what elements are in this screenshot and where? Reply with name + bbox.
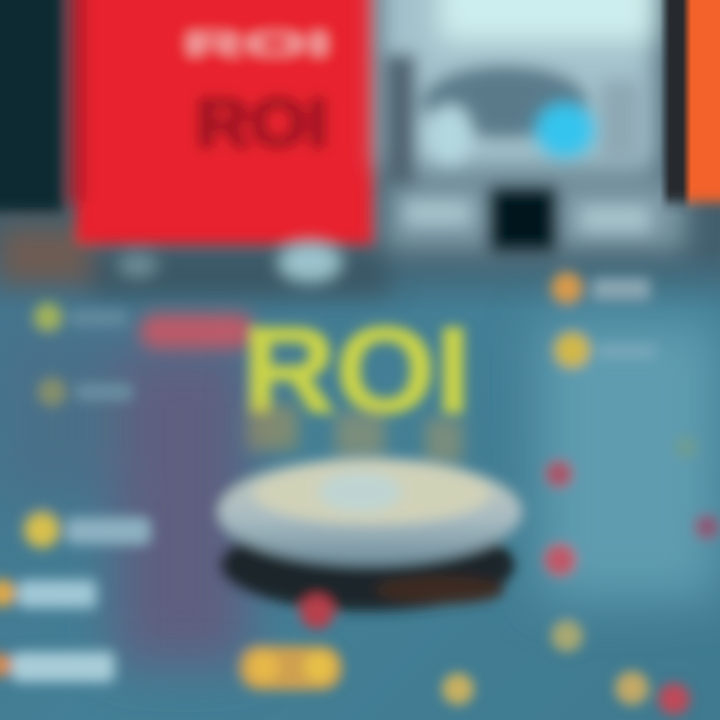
label 3: [24, 512, 150, 548]
background: brown floor left: [0, 228, 390, 295]
label 2: [38, 378, 132, 406]
label 7: [554, 332, 656, 368]
panel: orange screen top right: [660, 0, 720, 202]
reflected ROI letters: [248, 405, 463, 463]
robot body: [378, 0, 685, 250]
scattered data points: [300, 435, 720, 715]
panel: robot: [378, 0, 685, 250]
label 1: [34, 303, 126, 331]
left side labels: [0, 303, 150, 682]
dish top: [218, 458, 522, 566]
robot neck: [405, 188, 650, 250]
panel: red ROI box: [70, 0, 374, 244]
robot eye: [535, 102, 595, 158]
bottom yellow badge: [240, 646, 342, 690]
pedestal dish: [218, 458, 522, 611]
right side labels: [551, 272, 656, 368]
box heading: ROI: [184, 28, 330, 61]
label 6: [551, 272, 650, 304]
label 5: [0, 652, 114, 682]
dish base: [220, 519, 516, 611]
title: ROI glowing letters: ROI: [243, 302, 471, 438]
background: upper wall band: [0, 0, 720, 312]
panel: dark box top left: [0, 0, 64, 212]
label 4: [0, 579, 96, 608]
glowing blob under red box: [118, 242, 342, 348]
box label: ROI: [196, 85, 328, 161]
robot face: [385, 55, 640, 185]
background: purple left shadow: [0, 320, 720, 665]
